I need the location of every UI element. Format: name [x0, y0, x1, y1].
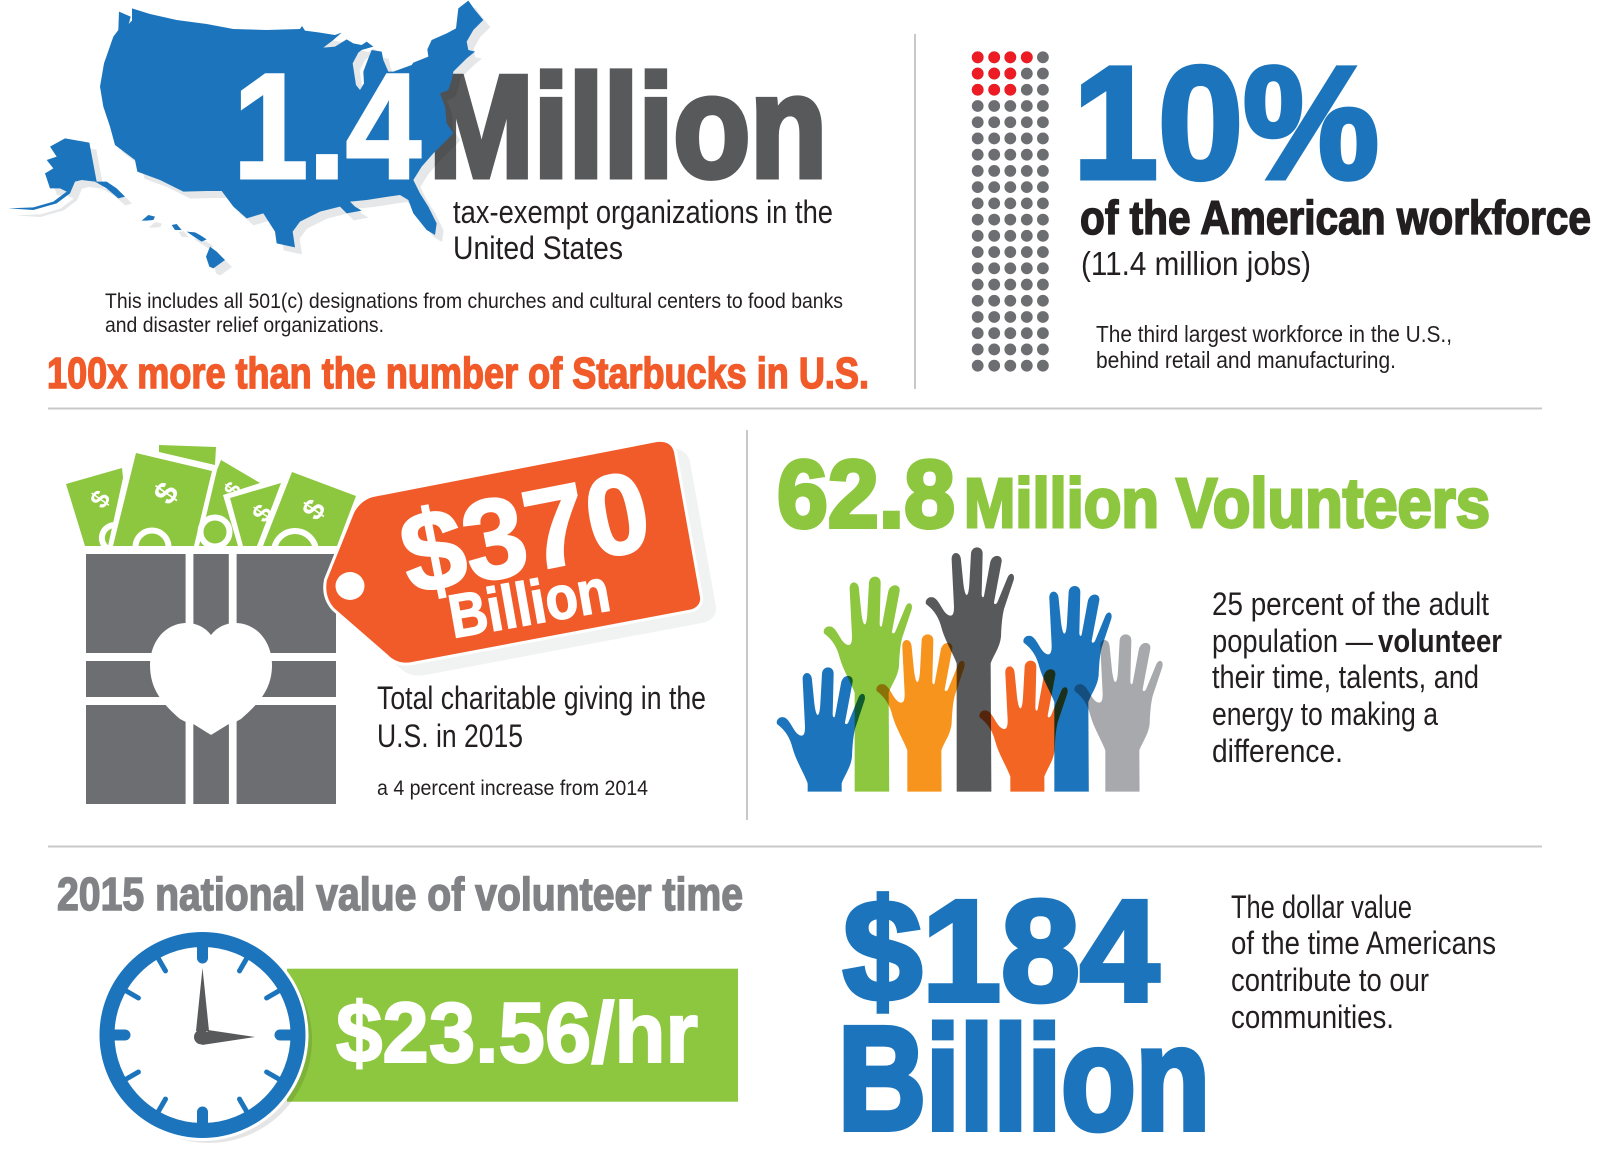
description: their time, talents, and — [1212, 659, 1479, 695]
dot chart: 10 of 100 — [978, 57, 1043, 366]
description: Total charitable giving in the — [377, 680, 706, 716]
heading: 62.8 — [777, 441, 955, 548]
description: difference. — [1212, 733, 1343, 769]
description: contribute to our — [1231, 962, 1429, 998]
panel: 10 percent of workforce — [978, 33, 1591, 373]
subtitle — [453, 194, 833, 266]
heading — [777, 441, 1490, 548]
big figure: $184 — [843, 870, 1159, 1032]
icon: money: $ — [296, 493, 333, 526]
big figure — [838, 870, 1210, 1161]
icon: clock — [96, 929, 312, 1143]
icon: money: $ — [219, 477, 246, 501]
Starbucks comparison: 100x more than the number of Starbucks in U.S. — [47, 349, 869, 398]
icon: money: $ — [246, 498, 279, 528]
panel: volunteers — [776, 458, 1502, 792]
rate banner — [287, 969, 738, 1102]
description — [105, 290, 843, 337]
icon: money — [66, 445, 356, 546]
big number 10%: 10% — [1073, 33, 1379, 212]
icon: raised hands — [776, 547, 1163, 792]
description: This includes all 501(c) designations from churches and cultural centers to food banks — [105, 290, 843, 313]
panel: 1.4 million organizations — [8, 1, 869, 398]
big figure: Billion — [838, 997, 1210, 1161]
note: The third largest workforce in the U.S., — [1096, 321, 1452, 347]
increase note: a 4 percent increase from 2014 — [377, 777, 648, 800]
description: The dollar value — [1231, 889, 1412, 925]
word Million: Million — [429, 46, 827, 208]
description — [1212, 586, 1502, 769]
description: energy to making a — [1212, 696, 1438, 732]
description: of the time Americans — [1231, 925, 1496, 961]
jobs count: (11.4 million jobs) — [1081, 245, 1311, 282]
description: volunteer — [1378, 623, 1502, 659]
icon: money: $ — [84, 484, 117, 514]
description: 25 percent of the adult — [1212, 586, 1489, 622]
panel: charitable giving — [66, 442, 713, 804]
heading: 2015 national value of volunteer time — [57, 868, 743, 920]
description — [377, 680, 706, 754]
price tag: Billion — [443, 556, 615, 651]
description: population — — [1212, 623, 1373, 659]
price tag — [326, 442, 713, 673]
description: and disaster relief organizations. — [105, 314, 384, 337]
note: behind retail and manufacturing. — [1096, 347, 1396, 373]
big number 1.4: 1.4 — [233, 42, 421, 210]
map: United States — [8, 1, 490, 275]
icon: gift box with heart — [86, 554, 336, 804]
description: communities. — [1231, 999, 1394, 1035]
subtitle: tax-exempt organizations in the — [453, 194, 833, 230]
subtitle: United States — [453, 230, 623, 266]
panel: 184 billion — [838, 870, 1496, 1161]
price tag: $370 — [391, 447, 660, 620]
description — [1231, 889, 1496, 1035]
icon: money: $ — [146, 475, 186, 511]
note — [1096, 321, 1452, 373]
panel: value of volunteer time — [57, 868, 743, 1143]
description: U.S. in 2015 — [377, 718, 523, 754]
rate banner: $23.56/hr — [336, 986, 698, 1081]
heading: Million Volunteers — [964, 464, 1490, 542]
